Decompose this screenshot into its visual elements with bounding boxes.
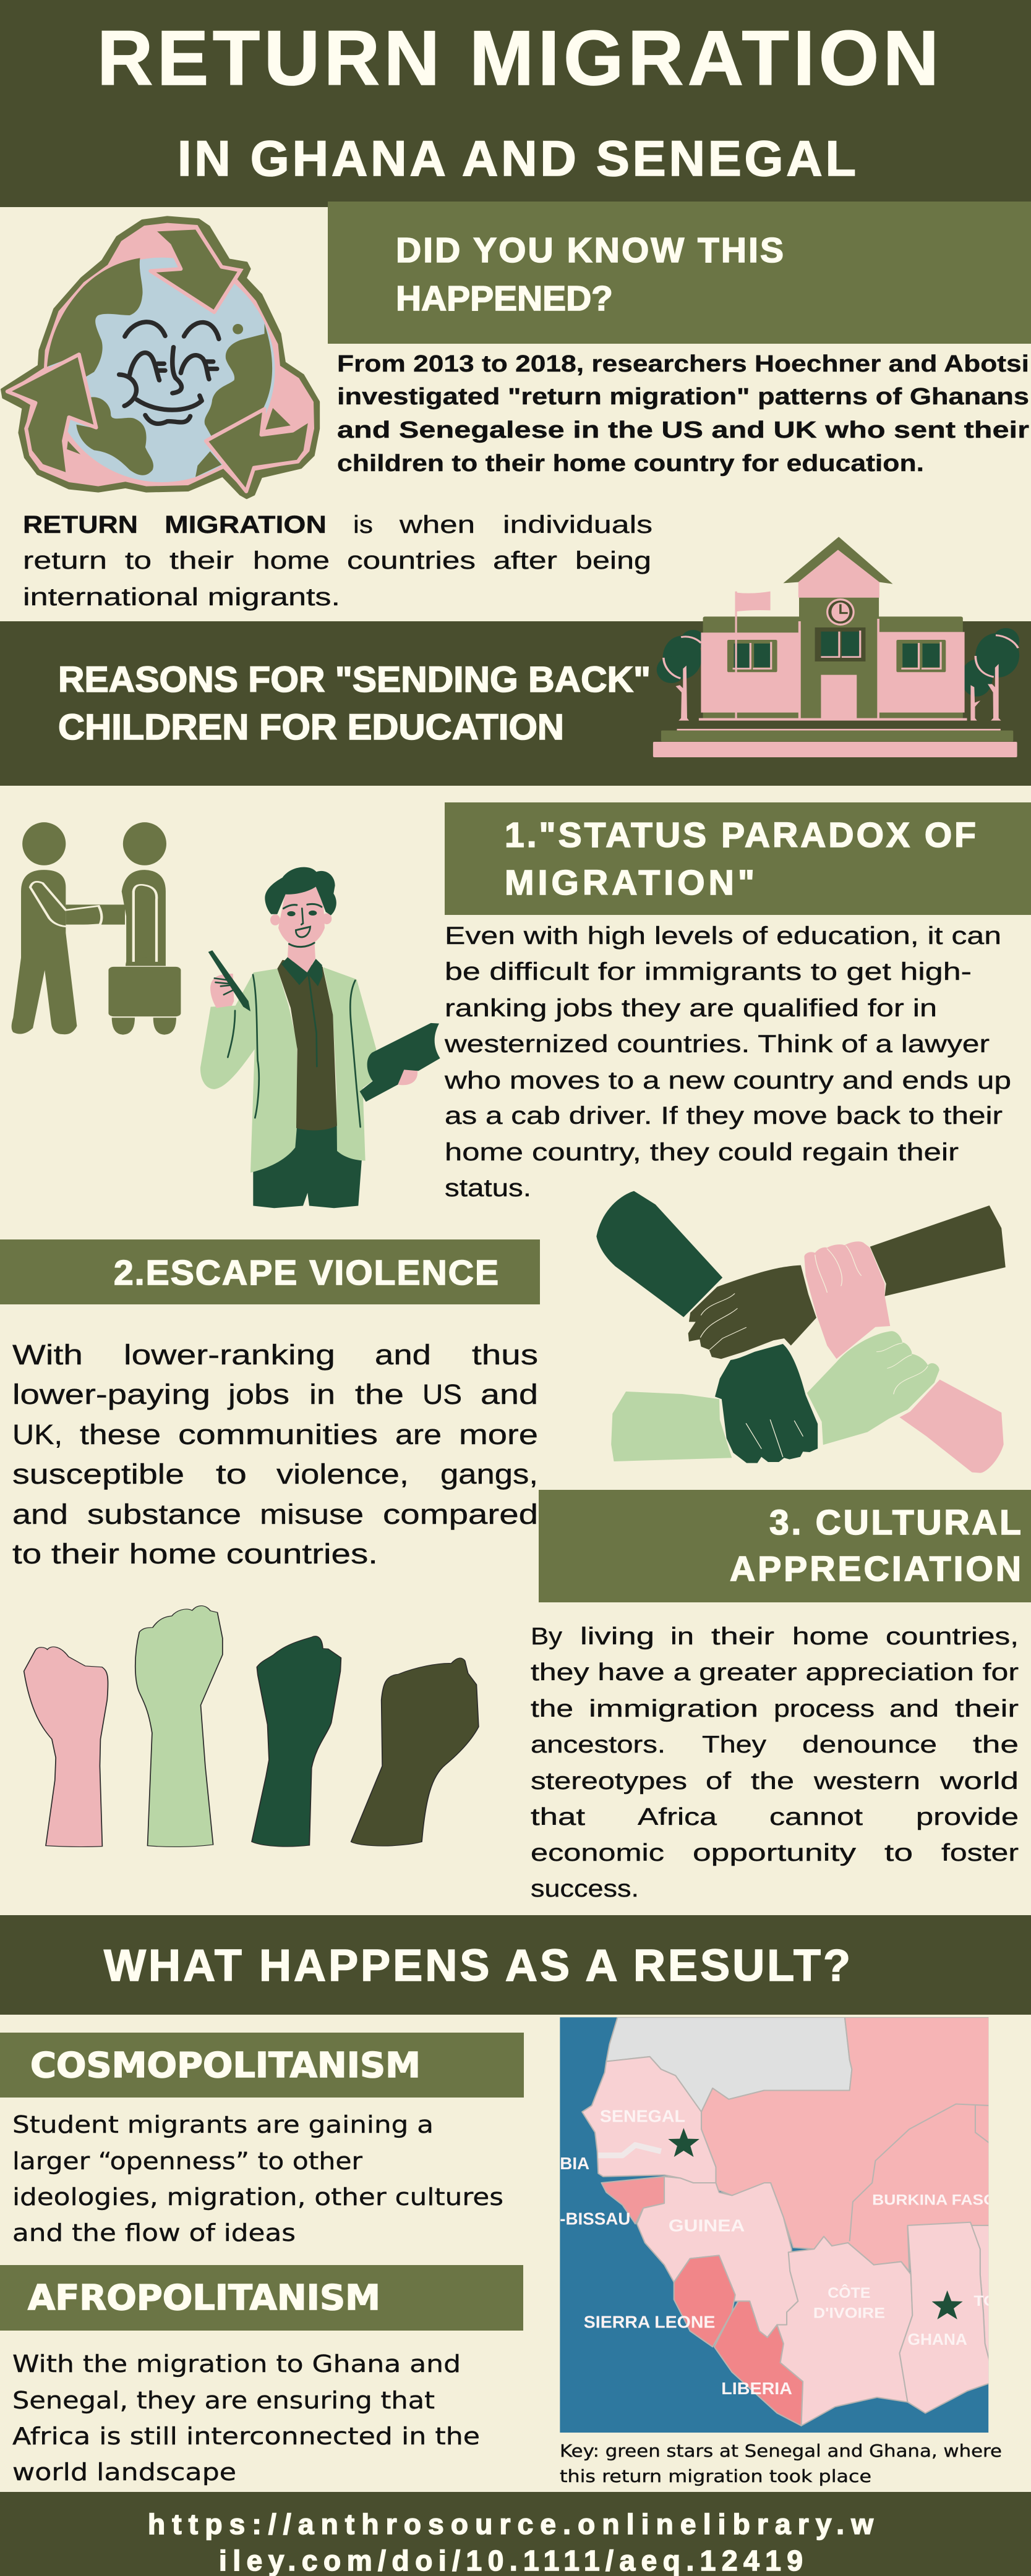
text block: escape violence: and: [12, 1498, 68, 1530]
text block: map key: [560, 2441, 1002, 2486]
text block: cosmopolitanism: ideologies, migration, other cultures: [12, 2183, 503, 2211]
text block: cultural appreciation: living: [580, 1623, 654, 1650]
icon: four raised fists: [24, 1606, 479, 1847]
icon: teacher holding folder and pen: [200, 867, 440, 1208]
text block: cultural appreciation: They: [702, 1732, 767, 1758]
panel: what happens band: WHAT HAPPENS AS A RESULT?: [104, 1941, 850, 1991]
text block: cultural appreciation: their: [711, 1623, 774, 1650]
map: West Africa with stars: LIBERIA: [721, 2379, 792, 2398]
text block: escape violence: UK,: [12, 1419, 62, 1450]
text block: escape violence: violence,: [276, 1458, 409, 1490]
text block: escape violence: in: [309, 1379, 335, 1410]
text block: escape violence: gangs,: [440, 1458, 538, 1490]
text block: status paradox: status.: [445, 1175, 531, 1202]
map: West Africa with stars: GUINEA: [669, 2216, 745, 2235]
text block: research summary: investigated "return migration" patterns of Ghanans: [337, 384, 1029, 410]
icon: two people shaking hands: [12, 822, 181, 1035]
text block: definition of return migration: being: [575, 547, 651, 574]
text block: cultural appreciation: economic: [531, 1840, 664, 1866]
map: West Africa with stars: CÔTE: [828, 2284, 871, 2302]
panel: afropolitanism heading: [0, 2265, 523, 2331]
map: West Africa with stars: TO: [973, 2293, 996, 2310]
footer: source link: https://anthrosource.onlinelibrary.w: [148, 2508, 873, 2540]
text block: escape violence: thus: [472, 1339, 538, 1371]
panel: cosmopolitanism heading: [0, 2033, 524, 2098]
text block: definition of return migration: international migrants.: [23, 584, 340, 611]
text block: research summary: and Senegalese in the US and UK who sent their: [337, 417, 1029, 443]
text block: status paradox: as a cab driver. If they move back to their: [445, 1102, 1003, 1129]
text block: definition of return migration: countries: [347, 547, 476, 574]
panel: reasons band: REASONS FOR "SENDING BACK": [58, 660, 651, 700]
text block: status paradox: home country, they could regain their: [445, 1139, 959, 1166]
text block: map key: Key: green stars at Senegal and Ghana, where: [560, 2441, 1002, 2461]
text block: status paradox: be difficult for immigrants to get high-: [445, 958, 972, 985]
text block: definition of return migration: their: [169, 547, 234, 574]
text block: cultural appreciation: Africa: [638, 1804, 717, 1830]
text block: cosmopolitanism: larger “openness” to other: [12, 2148, 362, 2175]
text block: afropolitanism: Africa is still interconnected in the: [12, 2423, 480, 2450]
panel: reason 1 heading: MIGRATION": [505, 863, 755, 903]
panel: reason 3 heading: APPRECIATION: [730, 1549, 1021, 1589]
text block: cultural appreciation: success.: [531, 1876, 639, 1902]
text block: cultural appreciation: western: [813, 1768, 920, 1795]
text block: status paradox: [444, 922, 1011, 1202]
text block: escape violence: to their home countries.: [12, 1538, 378, 1570]
text block: escape violence: and: [375, 1339, 431, 1371]
text block: cultural appreciation: foster: [941, 1840, 1019, 1866]
text block: definition of return migration: to: [125, 547, 152, 574]
text block: cultural appreciation: countries,: [886, 1623, 1019, 1650]
panel: afropolitanism heading: AFROPOLITANISM: [28, 2278, 380, 2318]
panel: what happens band: [0, 1915, 1031, 2015]
panel: reason 2 heading: [0, 1239, 540, 1304]
text block: escape violence: and: [481, 1379, 538, 1410]
map: West Africa with stars: BURKINA FASO: [872, 2192, 996, 2209]
text block: cultural appreciation: provide: [916, 1804, 1019, 1830]
text block: escape violence: jobs: [227, 1379, 289, 1410]
text block: cultural appreciation: By: [531, 1623, 563, 1650]
text block: research summary: [337, 351, 1029, 477]
text block: afropolitanism: Senegal, they are ensuring that: [12, 2387, 435, 2414]
text block: cultural appreciation: and: [889, 1696, 939, 1722]
icon: linked arms circle: [596, 1191, 1006, 1473]
map: West Africa with stars: [560, 2017, 996, 2433]
text block: research summary: children to their home country for education.: [337, 451, 924, 477]
text block: cultural appreciation: opportunity: [693, 1840, 857, 1866]
text block: definition of return migration: is: [353, 511, 373, 538]
text block: definition of return migration: [23, 511, 652, 611]
footer: source link: iley.com/doi/10.1111/aeq.12419: [219, 2544, 803, 2576]
text block: cultural appreciation: process: [774, 1696, 875, 1722]
text block: status paradox: westernized countries. Think of a lawyer: [444, 1031, 990, 1058]
text block: cultural appreciation: immigration: [589, 1696, 758, 1722]
text block: escape violence: to: [216, 1458, 247, 1490]
text block: definition of return migration: return: [23, 547, 107, 574]
text block: cultural appreciation: their: [955, 1696, 1019, 1722]
title banner: [0, 0, 1031, 207]
map: West Africa with stars: GHANA: [908, 2331, 967, 2349]
text block: escape violence: misuse: [260, 1498, 364, 1530]
text block: cultural appreciation: of: [706, 1768, 731, 1795]
text block: status paradox: who moves to a new country and ends up: [444, 1067, 1011, 1094]
text block: escape violence: lower-ranking: [124, 1339, 335, 1371]
text block: cultural appreciation: the: [973, 1732, 1019, 1758]
panel: reason 3 heading: [539, 1490, 1031, 1602]
text block: escape violence: With: [12, 1339, 83, 1371]
text block: map key: this return migration took place: [560, 2466, 871, 2486]
panel: reasons band: CHILDREN FOR EDUCATION: [58, 707, 564, 747]
text block: status paradox: ranking jobs they are qualified for in: [445, 995, 937, 1022]
map: West Africa with stars: SIERRA LEONE: [584, 2313, 715, 2332]
text block: research summary: From 2013 to 2018, researchers Hoechner and Abotsi: [337, 351, 1029, 377]
text block: cultural appreciation: home: [792, 1623, 869, 1650]
text block: escape violence: more: [459, 1419, 538, 1450]
map: West Africa with stars: D'IVOIRE: [813, 2305, 885, 2321]
panel: reasons band: [0, 621, 1031, 786]
text block: cultural appreciation: cannot: [769, 1804, 863, 1830]
map: West Africa with stars: -BISSAU: [560, 2209, 630, 2228]
main title: RETURN MIGRATION: [97, 15, 939, 101]
text block: cosmopolitanism: [12, 2111, 503, 2247]
text block: afropolitanism: world landscape: [12, 2459, 236, 2486]
panel: did you know heading: DID YOU KNOW THIS: [396, 231, 784, 270]
text block: definition of return migration: after: [493, 547, 557, 574]
panel: did you know heading: HAPPENED?: [396, 279, 613, 318]
text block: escape violence: communities: [178, 1419, 378, 1450]
text block: cultural appreciation: ancestors.: [531, 1732, 665, 1758]
text block: escape violence: the: [355, 1379, 404, 1410]
text block: cultural appreciation: denounce: [802, 1732, 937, 1758]
text block: escape violence: substance: [87, 1498, 241, 1530]
icon: school building: [653, 537, 1019, 757]
text block: cultural appreciation: that: [531, 1804, 585, 1830]
panel: reason 2 heading: 2.ESCAPE VIOLENCE: [114, 1253, 498, 1293]
text block: afropolitanism: With the migration to Ghana and: [12, 2350, 461, 2378]
text block: definition of return migration: when: [399, 511, 475, 538]
text block: escape violence: lower-paying: [12, 1379, 210, 1410]
text block: definition of return migration: MIGRATION: [165, 511, 327, 538]
panel: reason 1 heading: 1."STATUS PARADOX OF: [505, 815, 976, 855]
text block: cosmopolitanism: Student migrants are gaining a: [12, 2111, 434, 2138]
panel: cosmopolitanism heading: COSMOPOLITANISM: [30, 2046, 421, 2086]
text block: escape violence: [12, 1339, 538, 1570]
text block: cultural appreciation: the: [531, 1696, 573, 1722]
text block: definition of return migration: RETURN: [23, 511, 138, 538]
text block: definition of return migration: home: [253, 547, 330, 574]
icon: smiling globe with recycling arrows: [2, 217, 319, 498]
text block: cultural appreciation: world: [939, 1768, 1019, 1795]
text block: definition of return migration: individuals: [503, 511, 652, 538]
text block: escape violence: compared: [383, 1498, 538, 1530]
map: West Africa with stars: SENEGAL: [600, 2107, 685, 2125]
panel: reason 3 heading: 3. CULTURAL: [769, 1503, 1021, 1542]
text block: afropolitanism: [12, 2350, 480, 2486]
map: West Africa with stars: BIA: [560, 2154, 589, 2173]
text block: cultural appreciation: to: [884, 1840, 913, 1866]
text block: escape violence: are: [395, 1419, 442, 1450]
text block: cultural appreciation: in: [670, 1623, 694, 1650]
text block: escape violence: these: [80, 1419, 161, 1450]
text block: cultural appreciation: the: [751, 1768, 794, 1795]
text block: cultural appreciation: [531, 1623, 1019, 1902]
text block: escape violence: susceptible: [12, 1458, 184, 1490]
text block: status paradox: Even with high levels of education, it can: [445, 922, 1001, 950]
footer: source link: [0, 2492, 1031, 2576]
text block: escape violence: US: [422, 1379, 462, 1410]
subtitle: IN GHANA AND SENEGAL: [178, 131, 856, 187]
panel: did you know heading: [328, 202, 1031, 344]
text block: cultural appreciation: they have a greater appreciation for: [531, 1659, 1019, 1686]
text block: cultural appreciation: stereotypes: [531, 1768, 687, 1795]
panel: reason 1 heading: [445, 802, 1031, 915]
text block: cosmopolitanism: and the flow of ideas: [12, 2219, 296, 2247]
